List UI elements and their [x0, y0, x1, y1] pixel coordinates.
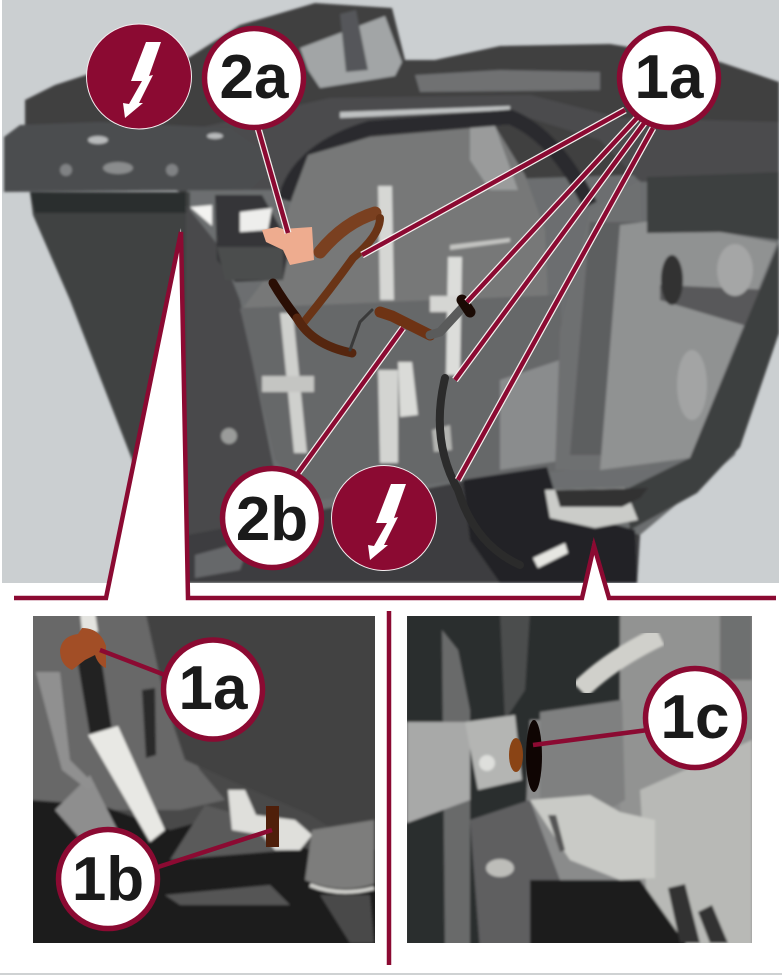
page edge [0, 973, 782, 975]
label 2b: 2b [236, 485, 308, 554]
wiring harness (copper) [273, 213, 520, 565]
connector housing [215, 195, 290, 282]
left frame block [4, 122, 266, 192]
label 1a top [620, 28, 718, 128]
copper clip 1b [266, 806, 279, 847]
back panel sheet [240, 126, 548, 312]
cable and plug [580, 636, 660, 690]
main photo: car seat frame [2, 0, 779, 583]
seat body [187, 170, 779, 583]
label 1a inset: 1a [179, 654, 248, 723]
connector tray [545, 488, 638, 528]
highlighted connector 2a [262, 227, 314, 265]
inset photo: left [30, 610, 380, 950]
label 2a: 2a [220, 43, 289, 112]
callout leader lines: main photo [258, 110, 653, 480]
label 1a inset [164, 640, 262, 739]
label 2a [204, 28, 304, 128]
white straps [378, 186, 394, 300]
dark inner arch [285, 117, 590, 205]
label 1a top: 1a [635, 43, 704, 112]
copper clip 1a [60, 628, 106, 670]
upper back silhouette [25, 3, 779, 240]
inset photo: right [405, 610, 755, 950]
left carpet side [30, 192, 190, 583]
copper washer and seal 1c [509, 720, 542, 792]
label 1b: 1b [72, 845, 144, 914]
label 2b [222, 468, 322, 568]
right dark rim [625, 243, 779, 530]
label 1c [646, 668, 744, 768]
label 1b [58, 830, 158, 928]
callout leader lines: insets [100, 650, 648, 868]
warning icon: electric bottom [332, 466, 436, 570]
white band around inset frame [0, 583, 782, 975]
arch band [190, 95, 779, 190]
callout frame lines [14, 228, 776, 965]
floor [187, 480, 640, 583]
lower metal panel [240, 295, 570, 500]
label 1c: 1c [661, 683, 729, 752]
warning icon: electric top [86, 24, 192, 129]
pillar and right panel [555, 180, 650, 470]
